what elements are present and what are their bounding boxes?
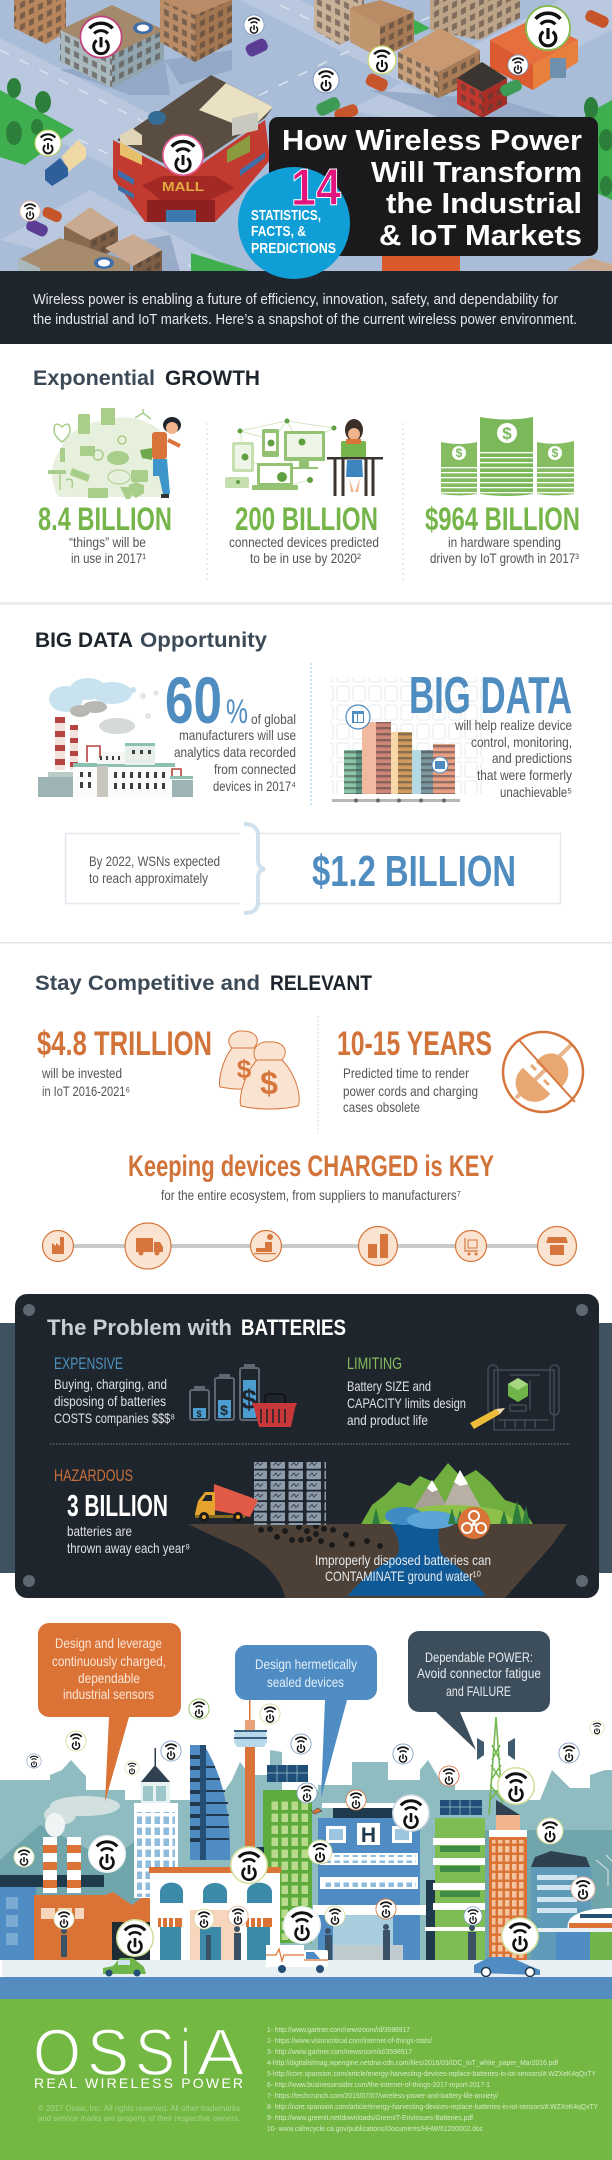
lower left buildings <box>18 207 612 271</box>
title box: the Industrial <box>386 188 582 220</box>
references list: 3- http://www.gartner.com/newsroom/id/3598917 <box>267 2049 412 2056</box>
section: stay competitive <box>35 972 583 1269</box>
14 statistics badge <box>238 159 350 279</box>
callout: blue speech bubble: Design hermetically <box>255 1656 357 1672</box>
batteries stack <box>254 1462 326 1525</box>
icon: connected devices and woman at desk <box>225 418 383 496</box>
references list: 6- http://www.businessinsider.com/the-internet-of-things-2017-report-2017-1 <box>267 2082 490 2089</box>
stat: big data: will help realize device <box>454 717 572 733</box>
callout: dark speech bubble <box>408 1631 550 1750</box>
curved blue tower <box>190 1745 230 1860</box>
references list: 9- http://www.greenit.net/downloads/GreenIT-EnvIssues-Batteries.pdf <box>267 2115 473 2122</box>
stat: 10-15 years: Predicted time to render <box>343 1065 469 1081</box>
references list: 8- http://core.spansion.com/article/energy-harvesting-devices-replace-batteries-in-iot-sensors/#.WZXeK4qQxTY <box>267 2104 598 2111</box>
stat: 4.8 trillion: in IoT 2016-2021⁶ <box>42 1083 130 1099</box>
icon: batteries and basket: $ <box>220 1402 228 1418</box>
buildings top right <box>314 0 578 118</box>
green tiered building <box>425 1800 485 1960</box>
heading: Stay Competitive and <box>35 972 260 995</box>
stat: 8.4 billion: 8.4 BILLION <box>38 501 172 537</box>
stat: 200 billion: 200 BILLION <box>235 501 378 537</box>
factory <box>0 1837 152 1960</box>
icon: data city <box>330 678 484 802</box>
callout: wsn market: $1.2 BILLION <box>312 847 516 896</box>
stat: 10-15 years: cases obsolete <box>343 1099 420 1115</box>
stat: 8.4 billion: “things” will be <box>69 534 146 550</box>
intro band: Wireless power is enabling a future of efficiency, innovation, safety, and dependability for <box>33 291 558 308</box>
stat: big data: and predictions <box>492 750 572 766</box>
stat: 60 percent: analytics data recorded <box>174 744 296 760</box>
heading: BATTERIES <box>241 1315 346 1340</box>
logo: REAL WIRELESS POWER <box>34 2075 243 2091</box>
icon: money stacks: $ <box>456 446 463 460</box>
keeping devices charged heading <box>128 1150 494 1203</box>
logo <box>33 2015 244 2091</box>
14 statistics badge: 14 <box>291 159 341 217</box>
stat: 60 percent: of global <box>251 711 296 727</box>
callout: dark speech bubble: and FAILURE <box>446 1683 511 1699</box>
callout: dark speech bubble: Avoid connector fatigue <box>417 1665 541 1681</box>
block: hazardous: batteries are <box>67 1523 132 1539</box>
icon: factory <box>38 678 193 797</box>
heading: Exponential <box>33 367 155 390</box>
icon: money bags: $ <box>260 1065 278 1101</box>
solar panel and green tower <box>246 1765 312 1943</box>
stat: 10-15 years <box>337 1025 492 1115</box>
stat: 60 percent: manufacturers will use <box>179 727 296 743</box>
stat: 200 billion <box>229 501 379 566</box>
blue car <box>474 1957 540 1976</box>
stat: 8.4 billion <box>38 501 172 566</box>
logo: A <box>197 2015 244 2089</box>
title box <box>269 117 598 256</box>
heading <box>35 972 372 995</box>
callout: orange speech bubble: dependable <box>78 1670 140 1686</box>
section: big data opportunity <box>0 629 612 944</box>
block: limiting: Battery SIZE and <box>347 1378 431 1394</box>
smoke <box>44 1796 120 1825</box>
stat: 8.4 billion: in use in 2017¹ <box>71 550 146 566</box>
logo: i <box>181 2015 190 2089</box>
stat: 60 percent: % <box>226 693 248 731</box>
icon: money stacks <box>441 417 574 496</box>
block: limiting: LIMITING <box>347 1354 402 1373</box>
block: limiting: CAPACITY limits design <box>347 1395 466 1411</box>
icon: biohazard <box>458 1507 490 1539</box>
observation tower <box>234 1700 267 1848</box>
block: limiting: and product life <box>347 1412 428 1428</box>
stat: 200 billion: connected devices predicted <box>229 534 379 550</box>
icon: batteries and basket: $ <box>241 1384 257 1415</box>
callout: orange speech bubble: continuously charged, <box>52 1653 166 1669</box>
storefront <box>149 1867 281 1960</box>
band behind batteries panel <box>0 1323 612 1573</box>
references list: 4-http://digitalistmag.wpengine.netdna-cdn.com/files/2016/03/IDC_IoT_white_paper_Mar2016.pdf <box>267 2060 558 2067</box>
wireless power badges: map <box>20 6 570 221</box>
icon: money bags <box>220 1031 299 1109</box>
icon: dump truck <box>195 1484 258 1522</box>
right side buildings and train <box>531 1851 612 1960</box>
stat: 10-15 years: 10-15 YEARS <box>337 1025 492 1063</box>
icon: money bags: $ <box>237 1054 252 1084</box>
logo: S <box>87 2015 129 2089</box>
stat: 964 billion: driven by IoT growth in 2017³ <box>430 550 579 566</box>
14 statistics badge: PREDICTIONS <box>251 240 336 257</box>
ambulance <box>266 1945 328 1973</box>
caption: CONTAMINATE ground water¹⁰ <box>325 1568 481 1584</box>
mall building <box>113 75 273 222</box>
copyright: and service marks are property of their respective owners. <box>38 2113 240 2123</box>
stat: 964 billion <box>425 501 580 566</box>
icon: person with connected things <box>48 408 181 499</box>
heading: The Problem with <box>47 1315 232 1340</box>
stat: 60 percent <box>165 663 296 794</box>
city illustration <box>0 1699 612 1977</box>
caption <box>315 1552 491 1584</box>
callout: blue speech bubble: sealed devices <box>267 1674 344 1690</box>
title box: & IoT Markets <box>379 220 582 252</box>
heading <box>35 629 267 652</box>
title box: Will Transform <box>371 157 582 189</box>
block: expensive: disposing of batteries <box>54 1393 166 1409</box>
logo: S <box>135 2015 175 2089</box>
stat: 60 percent: from connected <box>214 761 296 777</box>
stat: 10-15 years: power cords and charging <box>343 1083 478 1099</box>
block: hazardous <box>54 1466 190 1556</box>
block: expensive: COSTS companies $$$⁸ <box>54 1410 175 1426</box>
references list: 5-http://core.spansion.com/article/energy-harvesting-devices-replace-batteries-in-iot-sensors/#.WZXeK4qQxTY <box>267 2071 596 2078</box>
radio tower <box>477 1717 515 1815</box>
stat: big data <box>409 667 572 800</box>
heading <box>33 367 260 390</box>
block: hazardous: thrown away each year⁹ <box>67 1540 190 1556</box>
heading: BIG DATA <box>35 629 133 652</box>
copyright: © 2017 Ossia, Inc. All rights reserved. All other trademarks <box>38 2103 240 2113</box>
trees <box>6 78 612 196</box>
title box: How Wireless Power <box>282 125 582 157</box>
block: limiting <box>347 1354 466 1428</box>
heading <box>47 1315 346 1340</box>
white tower <box>134 1748 178 1898</box>
stat: 4.8 trillion <box>37 1025 212 1099</box>
supply chain icons <box>42 1223 576 1269</box>
14 statistics badge: FACTS, & <box>251 223 306 240</box>
people <box>61 1924 476 1960</box>
block: hazardous: 3 BILLION <box>67 1488 168 1523</box>
references list <box>267 2027 598 2133</box>
hero: aerial city map <box>0 0 612 271</box>
block: expensive <box>54 1354 175 1426</box>
stat: 4.8 trillion: will be invested <box>41 1065 122 1081</box>
green car <box>103 1958 146 1976</box>
callout: dark speech bubble: Dependable POWER: <box>425 1649 533 1665</box>
icon: batteries and basket <box>190 1364 297 1427</box>
wireless power badges: city <box>14 1699 604 1956</box>
section: exponential growth <box>0 367 612 605</box>
copyright <box>38 2103 240 2123</box>
buildings top left <box>14 0 232 88</box>
stat: big data: that were formerly <box>477 767 572 783</box>
callout: wsn market: By 2022, WSNs expected <box>89 853 220 869</box>
stat: 60 percent: devices in 2017⁴ <box>213 778 296 794</box>
stat: 60 percent: 60 <box>165 663 222 737</box>
hospital: H <box>361 1824 376 1847</box>
illustration: ground and water contamination <box>188 1462 567 1598</box>
skyline <box>0 1750 612 1960</box>
callout: orange speech bubble <box>38 1623 181 1802</box>
block: expensive: Buying, charging, and <box>54 1376 167 1392</box>
icon: money stacks: $ <box>552 446 559 460</box>
references list: 1- http://www.gartner.com/newsroom/id/3598917 <box>267 2027 410 2034</box>
hospital <box>310 1803 431 1960</box>
keeping devices charged heading: for the entire ecosystem, from suppliers to manufacturers⁷ <box>161 1187 461 1203</box>
icon: crossed out plug <box>503 1032 583 1112</box>
icon: batteries and basket: $ <box>196 1409 202 1419</box>
14 statistics badge: STATISTICS, <box>251 207 321 224</box>
references list: 7- https://techcrunch.com/2015/07/07/wireless-power-and-battery-life-anxiety/ <box>267 2093 498 2100</box>
mall sign: MALL <box>162 179 204 194</box>
callout: wsn market <box>66 824 560 913</box>
icon: blueprint <box>470 1365 559 1430</box>
stat: big data: control, monitoring, <box>471 734 572 750</box>
logo: O <box>33 2015 81 2089</box>
vehicles <box>24 8 610 238</box>
block: expensive: EXPENSIVE <box>54 1354 123 1373</box>
callout: blue speech bubble <box>235 1645 377 1798</box>
heading: RELEVANT <box>270 972 372 995</box>
references list: 10- www.calrecycle.ca.gov/publications/Documents/HHW/61200002.doc <box>267 2126 483 2133</box>
block: hazardous: HAZARDOUS <box>54 1466 133 1485</box>
stat: 200 billion: to be in use by 2020² <box>250 550 361 566</box>
orange tower <box>489 1800 527 1960</box>
references list: 2- https://www.visioncritical.com/internet-of-things-stats/ <box>267 2038 432 2045</box>
caption: Improperly disposed batteries can <box>315 1552 491 1568</box>
callout: orange speech bubble: Design and leverage <box>55 1635 162 1651</box>
blue stripe <box>0 1977 612 1999</box>
stat: 4.8 trillion: $4.8 TRILLION <box>37 1025 212 1063</box>
intro band <box>0 271 612 344</box>
heading: GROWTH <box>165 367 260 390</box>
stat: big data: unachievable⁵ <box>500 784 572 800</box>
heading: Opportunity <box>140 629 267 652</box>
panel: the problem with batteries <box>15 1294 599 1598</box>
stat: 964 billion: in hardware spending <box>448 534 561 550</box>
street scene <box>2 1924 612 1977</box>
icon: money stacks: $ <box>502 424 512 443</box>
callout: wsn market: to reach approximately <box>89 870 208 886</box>
footer panel <box>0 1999 612 2160</box>
callout: orange speech bubble: industrial sensors <box>63 1686 154 1702</box>
